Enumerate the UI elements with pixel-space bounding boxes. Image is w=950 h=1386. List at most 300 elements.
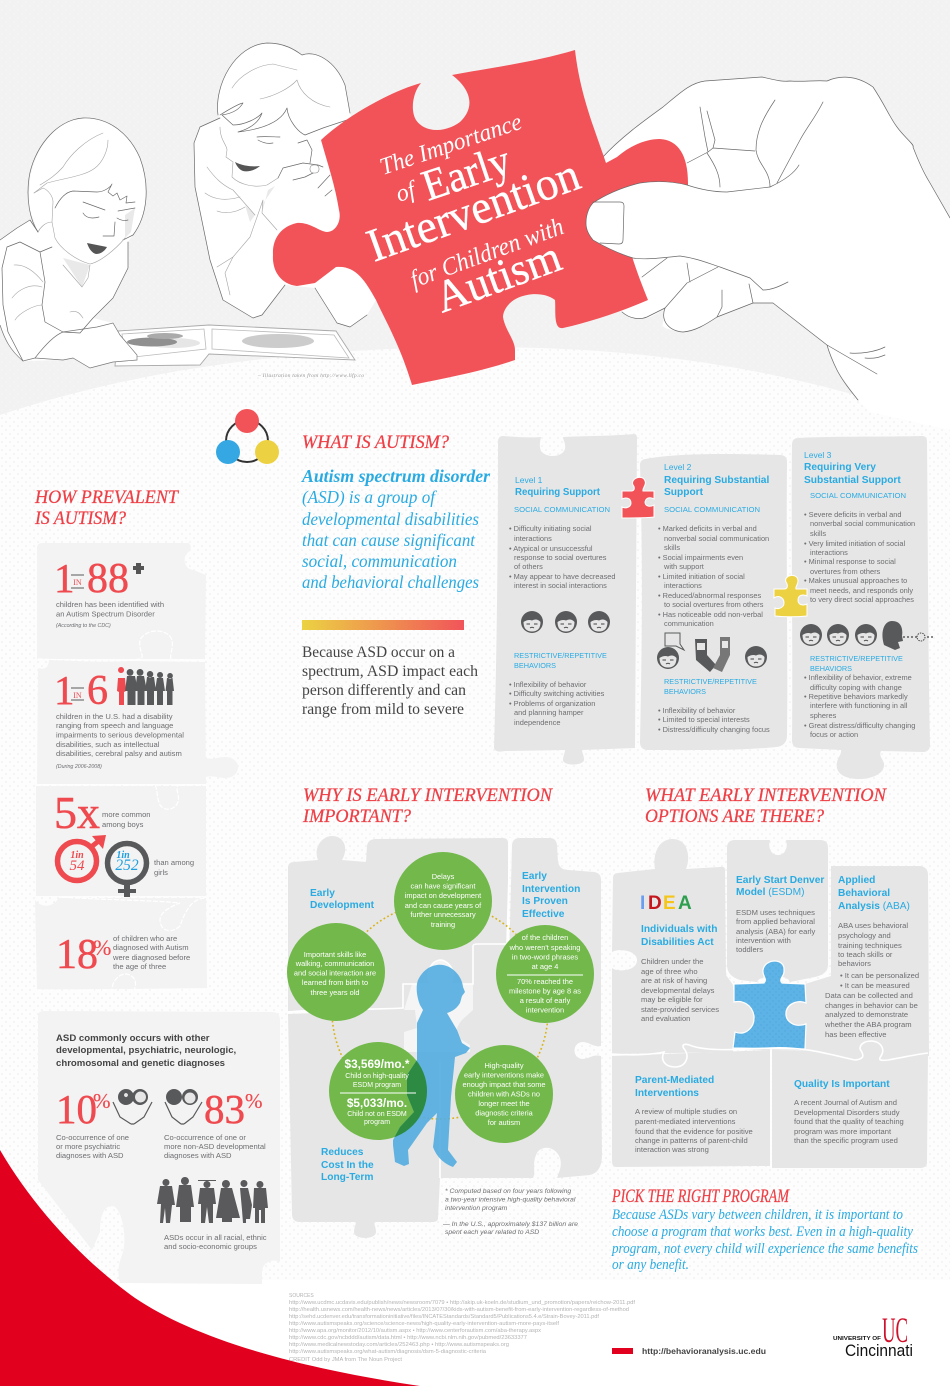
- stat: 1 in 6: (During 2006-2008): [56, 764, 102, 770]
- logo: University of Cincinnati: UC: [882, 1310, 908, 1350]
- sources: http://www.autismspeaks.org/science/science-news/high-quality-early-intervention-autism-more-pays-itself: [289, 1321, 560, 1327]
- panel: level 1: and planning hamper: [514, 708, 584, 717]
- stat: 1 in 6: impairments to serious developmental: [56, 730, 184, 740]
- footnote: — In the U.S., approximately $137 billion are: [442, 1221, 578, 1228]
- panel: level 2: • Limited initiation of social: [658, 572, 745, 581]
- puzzle piece: ESDM: toddlers: [736, 945, 763, 954]
- puzzle piece: ESDM: Model (ESDM): [736, 887, 804, 898]
- panel: level 3: SOCIAL COMMUNICATION: [810, 491, 906, 500]
- puzzle piece: ABA: Applied: [838, 875, 875, 886]
- stat: 10 percent: diagnoses with ASD: [56, 1151, 124, 1160]
- puzzle piece: IDEA: Disabilities Act: [641, 937, 714, 948]
- icon: small puzzle star: [133, 563, 144, 574]
- panel: level 3: • Makes unusual approaches to: [804, 576, 907, 585]
- text block: pick the right program: Because ASDs vary between children, it is important to: [612, 1207, 903, 1223]
- panel: level 3: Requiring Very: [804, 462, 876, 473]
- panel: level 2: BEHAVIORS: [664, 687, 706, 696]
- IDEA logo: [640, 893, 692, 914]
- icon: hands holding two heads: [113, 1089, 152, 1124]
- panel: level 2: • Marked deficits in verbal and: [658, 524, 757, 533]
- puzzle piece: ABA: changes in behavior can be: [825, 1001, 918, 1010]
- puzzle piece: quality: Developmental Disorders study: [794, 1108, 900, 1117]
- label: early development: Early: [310, 888, 335, 899]
- panel: level 1: [494, 434, 637, 764]
- label: intervention proven effective: Effective: [522, 909, 565, 920]
- panel: level 1: • Difficulty switching activities: [509, 689, 605, 698]
- icon: male symbol: 54: [70, 858, 85, 874]
- footnote: * Computed based on four years following: [445, 1188, 571, 1195]
- stat: 1 in 6: disabilities, such as intellectual: [56, 740, 160, 749]
- circle: delays: [394, 852, 492, 950]
- panel: level 3: • Very limited initiation of social: [804, 539, 906, 548]
- panel: level 1: RESTRICTIVE/REPETITIVE: [514, 651, 607, 660]
- icon: diverse people: [157, 1177, 268, 1223]
- stat: 18 percent: of children who are: [113, 934, 177, 943]
- cost figures on circle: Child not on ESDM: [347, 1111, 407, 1118]
- puzzle piece: ABA: Data can be collected and: [825, 991, 913, 1000]
- stat: 1 in 6: 1: [54, 667, 74, 713]
- icon: socks: [695, 637, 730, 672]
- icon: three linked circles: [216, 409, 279, 464]
- panel: level 3: overtures from others: [810, 567, 881, 576]
- puzzle piece: quality: program was more important: [794, 1127, 892, 1136]
- footnote: a two-year intensive high-quality behavioral: [445, 1196, 576, 1204]
- puzzle piece: parent-mediated: Interventions: [635, 1088, 699, 1099]
- text block: spectrum: person differently and can: [302, 682, 466, 699]
- illustration: hand behind puzzle piece: [602, 77, 950, 430]
- circle: high quality: longer meet the: [478, 1099, 530, 1108]
- stat: 1 in 88: 1: [54, 555, 74, 601]
- stat: 10 percent: %: [93, 1089, 110, 1113]
- circle: high quality: High-quality: [484, 1061, 524, 1070]
- label: reduces cost: Cost In the: [321, 1160, 374, 1171]
- circle: proven effective: 70% reached the: [517, 977, 573, 986]
- puzzle piece: ABA: ABA uses behavioral: [838, 921, 908, 930]
- circle: proven effective: intervention: [526, 1006, 564, 1014]
- red swoop: [0, 1150, 420, 1386]
- illustration credit: – Illustration taken from http://www.lifp.co: [257, 372, 364, 379]
- puzzle piece: IDEA: [612, 839, 733, 1054]
- stat: 5x more common among boys: 5x: [54, 787, 100, 838]
- panel: level 3: difficulty coping with change: [810, 683, 902, 692]
- circle: high quality: children with ASDs no: [468, 1090, 540, 1098]
- puzzle piece: IDEA: Individuals with: [641, 924, 717, 935]
- stat: 5x more common among boys: [54, 787, 194, 897]
- puzzle piece: ESDM: from applied behavioral: [736, 917, 815, 926]
- icon: female symbol: 1in: [116, 850, 130, 861]
- label: intervention proven effective: Intervention: [522, 884, 580, 895]
- circle: important skills: Important skills like: [304, 950, 366, 959]
- icon: face with swirl: [745, 646, 767, 668]
- panel: co-occurring diagnoses: [38, 1011, 280, 1284]
- heading: ASD co-occurrence: chromosomal and genetic diagnoses: [56, 1058, 225, 1069]
- panel: co-occurring diagnoses: ASDs occur in all racial, ethnic: [164, 1233, 267, 1242]
- stat: 83 percent: %: [245, 1089, 262, 1113]
- circle: cost: [329, 1042, 427, 1140]
- heading: how prevalent: HOW PREVALENT: [34, 487, 179, 508]
- stat: 83 percent: 83: [204, 1086, 245, 1132]
- panel: level 3: • Inflexibility of behavior, extreme: [804, 673, 912, 682]
- panel: level 2: • Limited to special interests: [658, 715, 750, 724]
- puzzle piece: ABA: has been effective: [825, 1030, 886, 1039]
- gray backing behind blue piece: [726, 990, 812, 1050]
- title text: The Importance: [377, 109, 526, 181]
- panel: level 1: Requiring Support: [515, 487, 601, 498]
- sources: [289, 1293, 636, 1363]
- puzzle piece: ESDM: intervention with: [736, 936, 791, 945]
- cost figures on circle: Child on high-quality: [345, 1073, 409, 1080]
- title puzzle piece: [273, 50, 688, 385]
- stat: 18 percent: 18: [56, 932, 98, 978]
- illustration: grandmother: [194, 43, 376, 327]
- stat: 10 percent: 10: [56, 1086, 97, 1132]
- puzzle piece: ABA: Analysis (ABA): [838, 901, 910, 912]
- stat: 1 in 6: disabilities, cerebral palsy and autism: [56, 749, 182, 758]
- IDEA logo: D: [648, 893, 662, 914]
- panel: level 3: Substantial Support: [804, 475, 901, 486]
- stat: 1 in 88: 88: [87, 556, 129, 602]
- panel: level 2: to social overtures from others: [664, 600, 764, 609]
- puzzle piece: ESDM: analysis (ABA) for early: [736, 927, 816, 936]
- puzzle piece: IDEA: state-provided services: [641, 1005, 719, 1014]
- puzzle piece: IDEA: may be eligible for: [641, 995, 703, 1004]
- circle: proven effective: in two-word phrases: [512, 952, 578, 962]
- panel: level 2: SOCIAL COMMUNICATION: [664, 505, 760, 514]
- puzzle piece: IDEA: and evaluation: [641, 1014, 690, 1023]
- logo: University of Cincinnati: [833, 1310, 913, 1360]
- illustration: thumb over the piece: [586, 182, 800, 290]
- puzzle piece: ABA: • It can be measured: [840, 981, 910, 990]
- sources: http://health.usnews.com/health-news/news/articles/2013/07/30/kids-with-autism-benefit-from-early-intervention-regardless-of-method: [289, 1307, 629, 1313]
- url tag: http://behavioranalysis.uc.edu: [642, 1346, 766, 1356]
- text block: definition: that can cause significant: [302, 530, 476, 550]
- circle: important skills: three years old: [311, 988, 359, 997]
- puzzle piece: parent-mediated: parent-mediated interventions: [635, 1117, 736, 1126]
- icon: faces row level 3: [800, 621, 934, 650]
- child silhouette: [393, 965, 470, 1167]
- panel: why early intervention puzzle: [288, 836, 602, 1238]
- illustration: child reading a book: [0, 118, 355, 368]
- text block: definition: Autism spectrum disorder: [301, 466, 491, 486]
- panel: co-occurring diagnoses: and socio-economic groups: [164, 1242, 257, 1251]
- panel: how prevalent puzzle column: [35, 543, 238, 990]
- text block: definition: developmental disabilities: [302, 509, 479, 529]
- stat: 18 percent: [56, 932, 190, 978]
- heading: ASD co-occurrence: developmental, psychiatric, neurologic,: [56, 1045, 237, 1056]
- panel: level 2: communication: [664, 619, 714, 628]
- text block: spectrum: range from mild to severe: [302, 701, 464, 718]
- puzzle piece: ABA: [805, 866, 929, 1056]
- text block: pick the right program: [611, 1207, 918, 1273]
- stat: 18 percent: were diagnosed before: [112, 953, 190, 962]
- stat: 18 percent: diagnosed with Autism: [113, 943, 189, 952]
- panel: level 3: [792, 436, 934, 779]
- panel: level 1: interest in social interactions: [514, 581, 607, 590]
- icon: blue puzzle piece: [733, 961, 806, 1049]
- circle: high quality: [455, 1045, 553, 1143]
- puzzle piece: IDEA: are at risk of having: [641, 976, 707, 985]
- footnote: spent each year related to ASD: [445, 1229, 539, 1236]
- stat: 1 in 6: children in the U.S. had a disability: [56, 712, 173, 721]
- stat: 1 in 88: IN: [73, 578, 82, 587]
- panel: level 3: nonverbal social communication: [810, 519, 915, 528]
- text block: pick the right program: or any benefit.: [612, 1257, 689, 1273]
- IDEA logo: I: [640, 893, 645, 914]
- sources: http://www.cdc.gov/ncbddd/autism/data.html • http://www.ncbi.nlm.nih.gov/pubmed/23633377: [289, 1335, 527, 1341]
- icon: red puzzle piece: [622, 477, 654, 518]
- stat: 1 in 6: [54, 667, 184, 770]
- panel: level 1: of others: [514, 562, 543, 571]
- label: reduces cost: Long-Term: [321, 1172, 373, 1183]
- panel: level 3: • Minimal response to social: [804, 557, 896, 566]
- text block: definition: and behavioral challenges: [302, 572, 479, 592]
- panel: level 2: • Has noticeable odd non-verbal: [658, 610, 763, 619]
- stat: 83 percent: more non-ASD developmental: [164, 1142, 266, 1151]
- panel: level 3: spheres: [810, 711, 837, 720]
- panel: level 1: Level 1: [515, 475, 543, 485]
- background: dotted lower field: [0, 347, 950, 1280]
- title text: Early: [416, 135, 517, 210]
- panel: level 2: • Reduced/abnormal responses: [658, 591, 762, 600]
- icon: female symbol: [108, 844, 146, 897]
- icon: female symbol: 252: [115, 857, 139, 874]
- stat: 18 percent: the age of three: [113, 962, 166, 971]
- puzzle piece: ESDM: Early Start Denver: [736, 875, 824, 886]
- background: top grey field: [0, 0, 950, 440]
- panel: level 3: interfere with functioning in all: [810, 701, 908, 710]
- panel: level 3: to very direct social approaches: [810, 595, 914, 604]
- stat: 1 in 88: [54, 555, 164, 629]
- footnote: intervention program: [445, 1205, 508, 1212]
- IDEA logo: A: [678, 893, 692, 914]
- panel: options puzzle: [612, 839, 929, 1168]
- circle: proven effective: [496, 925, 594, 1023]
- icon: hands holding heads, second: [165, 1089, 202, 1124]
- sources: SOURCES: [289, 1293, 314, 1299]
- puzzle piece: ABA: to teach skills or: [838, 950, 893, 959]
- label: intervention proven effective: Early: [522, 871, 547, 882]
- dotted ring: [332, 903, 548, 1119]
- panel: level 1: independence: [514, 718, 560, 727]
- puzzle piece: ESDM: ESDM uses techniques: [736, 908, 815, 917]
- gradient bar: [302, 620, 464, 630]
- icon: row of children: [117, 667, 174, 705]
- circle: delays: further unnecessary: [410, 910, 476, 919]
- text block: pick the right program: choose a program that works best. Even in a high-quality: [612, 1224, 913, 1240]
- label: reduces cost: Reduces: [321, 1147, 364, 1158]
- text block: spectrum: [302, 644, 478, 718]
- heading: what is autism: WHAT IS AUTISM?: [302, 432, 449, 453]
- puzzle piece: ABA: psychology and: [838, 931, 891, 940]
- icon: male symbol: [58, 835, 106, 880]
- cost figures on circle: $3,569/mo.*: [345, 1057, 410, 1071]
- circle: delays: can have significant: [411, 882, 475, 890]
- stat: 83 percent: [164, 1086, 266, 1160]
- stat: 83 percent: diagnoses with ASD: [164, 1151, 232, 1160]
- panel: level 1: • Difficulty initiating social: [509, 524, 592, 533]
- circle: high quality: diagnostic criteria: [475, 1108, 534, 1118]
- puzzle piece: parent-mediated: A review of multiple studies on: [635, 1107, 737, 1116]
- puzzle piece: IDEA: Children under the: [641, 957, 703, 966]
- panel: level 3: • Severe deficits in verbal and: [804, 510, 902, 519]
- circle: high quality: early interventions make: [464, 1070, 544, 1080]
- stat: 1 in 6: 6: [87, 668, 108, 714]
- title text: Intervention: [360, 149, 587, 272]
- panel: level 2: Support: [664, 487, 704, 498]
- sources: http://www.autismspeaks.org/what-autism/diagnosis/dsm-5-diagnostic-criteria: [289, 1349, 486, 1355]
- circle: important skills: learned from birth to: [302, 978, 368, 987]
- puzzle piece: ABA: Behavioral: [838, 888, 890, 899]
- circle: proven effective: at age 4: [532, 962, 558, 971]
- text block: definition: social, communication: [302, 551, 457, 571]
- puzzle piece: quality: A recent Journal of Autism and: [794, 1098, 897, 1107]
- panel: level 3: • Great distress/difficulty changing: [804, 721, 915, 730]
- sources: http://www.ucdmc.ucdavis.edu/publish/news/newsroom/7079 • http://akip.uk-koeln.de/studium_und_promotion/papers/reichow-2011.pdf: [289, 1300, 636, 1306]
- circle: proven effective: of the children: [522, 933, 568, 942]
- circle: high quality: for autism: [488, 1118, 520, 1127]
- sources: CREDIT Odd by JMA from The Noun Project: [289, 1357, 403, 1363]
- circle: proven effective: who weren't speaking: [509, 943, 580, 952]
- stat: 1 in 6: IN: [73, 691, 82, 700]
- panel: level 1: SOCIAL COMMUNICATION: [514, 505, 610, 514]
- panel: level 3: BEHAVIORS: [810, 664, 852, 673]
- panel: level 1: BEHAVIORS: [514, 661, 556, 670]
- heading: how prevalent: IS AUTISM?: [34, 508, 126, 529]
- puzzle piece: quality: [772, 1050, 928, 1168]
- stat: 83 percent: Co-occurrence of one or: [164, 1133, 246, 1142]
- sources: http://www.medicalnewstoday.com/articles/252463.php • http://www.autismspeaks.org: [289, 1342, 509, 1348]
- cost figures on circle: [340, 1057, 416, 1126]
- puzzle piece: ABA: training techniques: [838, 941, 902, 950]
- puzzle piece: ABA: • It can be personalized: [840, 971, 919, 980]
- stat: 1 in 88: children has been identified with: [56, 600, 164, 609]
- puzzle piece: ABA: analyzed to demonstrate: [825, 1010, 908, 1019]
- cost figures on circle: ESDM program: [353, 1082, 401, 1089]
- text block: definition: [301, 466, 491, 592]
- stat: 10 percent: Co-occurrence of one: [56, 1133, 129, 1142]
- puzzle piece: parent-mediated: Parent-Mediated: [635, 1075, 714, 1086]
- heading: why is early intervention important: IMPORTANT?: [302, 806, 411, 827]
- puzzle piece: ABA: whether the ABA program: [824, 1020, 912, 1029]
- panel: level 2: skills: [664, 543, 680, 552]
- circle: delays: Delays: [432, 872, 455, 881]
- puzzle piece: quality: Quality Is Important: [794, 1079, 890, 1090]
- panel: level 2: Level 2: [664, 462, 692, 472]
- icon: face with speech bubble: [657, 633, 684, 669]
- panel: level 1: response to social overtures: [514, 553, 607, 562]
- stat: 5x more common among boys: than among: [154, 858, 194, 867]
- circle: delays: and can cause years of: [405, 901, 482, 910]
- stat: 5x more common among boys: girls: [154, 868, 168, 877]
- stat: 1 in 88: (According to the CDC): [56, 623, 111, 629]
- panel: level 3: focus or action: [810, 730, 858, 739]
- puzzle piece: parent-mediated: found that the evidence for positive: [635, 1127, 753, 1136]
- puzzle piece: ABA: behaviors: [838, 959, 871, 968]
- stat: 1 in 88: an Autism Spectrum Disorder: [56, 610, 155, 618]
- panel: level 2: interactions: [664, 581, 702, 590]
- title text: [360, 109, 587, 322]
- panel: level 3: • Repetitive behaviors markedly: [804, 692, 908, 701]
- cost figures on circle: $5,033/mo.: [347, 1096, 407, 1110]
- panel: level 3: interactions: [810, 548, 848, 557]
- title text: Autism: [428, 231, 568, 322]
- panel: level 1: • Atypical or unsuccessful: [509, 544, 593, 553]
- panel: level 2: Requiring Substantial: [664, 475, 769, 486]
- panel: level 3: skills: [810, 529, 826, 538]
- sources: http://sehd.ucdenver.edu/transformationinitiative/files/INCATEStandards/Standard5/Publications5.4.e/Strain-Bovey-2011.pdf: [289, 1314, 600, 1320]
- stat: 1 in 6: ranging from speech and language: [56, 721, 173, 730]
- puzzle piece: quality: found that the quality of teaching: [794, 1117, 904, 1126]
- heading: what early intervention options: WHAT EARLY INTERVENTION: [645, 785, 887, 806]
- heading: what early intervention options: OPTIONS ARE THERE?: [645, 806, 824, 827]
- panel: level 3: meet needs, and responds only: [810, 586, 913, 595]
- puzzle piece: parent-mediated: interaction was strong: [635, 1145, 709, 1154]
- text block: spectrum: spectrum, ASD impact each: [302, 663, 478, 680]
- panel: level 2: nonverbal social communication: [664, 534, 769, 543]
- panel: level 2: RESTRICTIVE/REPETITIVE: [664, 677, 757, 686]
- sources: http://www.apa.org/monitor/2012/10/autism.aspx • http://www.centerforautism.com/aba-therapy.aspx: [289, 1328, 542, 1334]
- stat: 10 percent: [56, 1086, 129, 1160]
- logo: University of Cincinnati: UNIVERSITY OF: [833, 1336, 882, 1342]
- circle: delays: impact on development: [405, 891, 481, 900]
- circle: proven effective: milestone by age 8 as: [509, 986, 581, 996]
- panel: level 2: • Distress/difficulty changing focus: [658, 725, 770, 734]
- IDEA logo: E: [663, 893, 676, 914]
- text block: definition: (ASD) is a group of: [302, 487, 438, 508]
- heading: ASD co-occurrence: ASD commonly occurs with other: [56, 1033, 210, 1044]
- icon: male symbol: 1in: [70, 850, 84, 861]
- puzzle piece: parent-mediated: [612, 1050, 770, 1167]
- stat: 5x more common among boys: more common: [102, 810, 151, 819]
- circle: important skills: walking, communication: [295, 959, 374, 968]
- puzzle piece: IDEA: age of three who: [641, 967, 698, 976]
- label: intervention proven effective: Is Proven: [522, 896, 568, 907]
- panel: level 2: [640, 454, 787, 750]
- circle: proven effective: a result of early: [520, 996, 571, 1005]
- panel: level 1: interactions: [514, 534, 552, 543]
- panel: level 2: • Inflexibility of behavior: [658, 706, 736, 715]
- stat: 18 percent: %: [93, 935, 111, 960]
- title text: for Children with: [407, 213, 567, 294]
- puzzle piece: ESDM: [727, 840, 828, 982]
- heading: why is early intervention important: WHY IS EARLY INTERVENTION: [303, 785, 553, 806]
- label: early development: Development: [310, 900, 375, 911]
- title text: of: [393, 176, 422, 208]
- stat: 10 percent: or more psychiatric: [56, 1142, 120, 1151]
- stat: 5x more common among boys: among boys: [102, 820, 144, 829]
- puzzle piece: IDEA: developmental delays: [641, 986, 715, 995]
- circle: delays: training: [431, 920, 455, 929]
- cost figures on circle: program: [364, 1119, 390, 1126]
- circle: high quality: enough impact that some: [462, 1080, 546, 1089]
- heading: pick the right program: PICK THE RIGHT PROGRAM: [611, 1186, 790, 1207]
- icon: yellow puzzle piece: [774, 575, 807, 617]
- panel: level 2: • Social impairments even: [658, 553, 743, 562]
- logo: University of Cincinnati: Cincinnati: [845, 1341, 913, 1360]
- panel: level 1: • Inflexibility of behavior: [509, 680, 587, 689]
- icon: faces row level 1: [521, 611, 610, 633]
- text block: spectrum: Because ASD occur on a: [302, 644, 455, 661]
- panel: level 1: • Problems of organization: [509, 699, 595, 708]
- puzzle piece: parent-mediated: change in patterns of parent-child: [635, 1136, 748, 1145]
- circle: important skills: [287, 923, 385, 1021]
- panel: level 2: with support: [663, 562, 704, 571]
- circle: important skills: and social interaction are: [294, 968, 376, 978]
- puzzle piece: quality: than the specific program used: [794, 1136, 898, 1145]
- panel: level 1: • May appear to have decreased: [509, 572, 616, 581]
- panel: level 3: Level 3: [804, 450, 832, 460]
- panel: level 3: RESTRICTIVE/REPETITIVE: [810, 654, 903, 663]
